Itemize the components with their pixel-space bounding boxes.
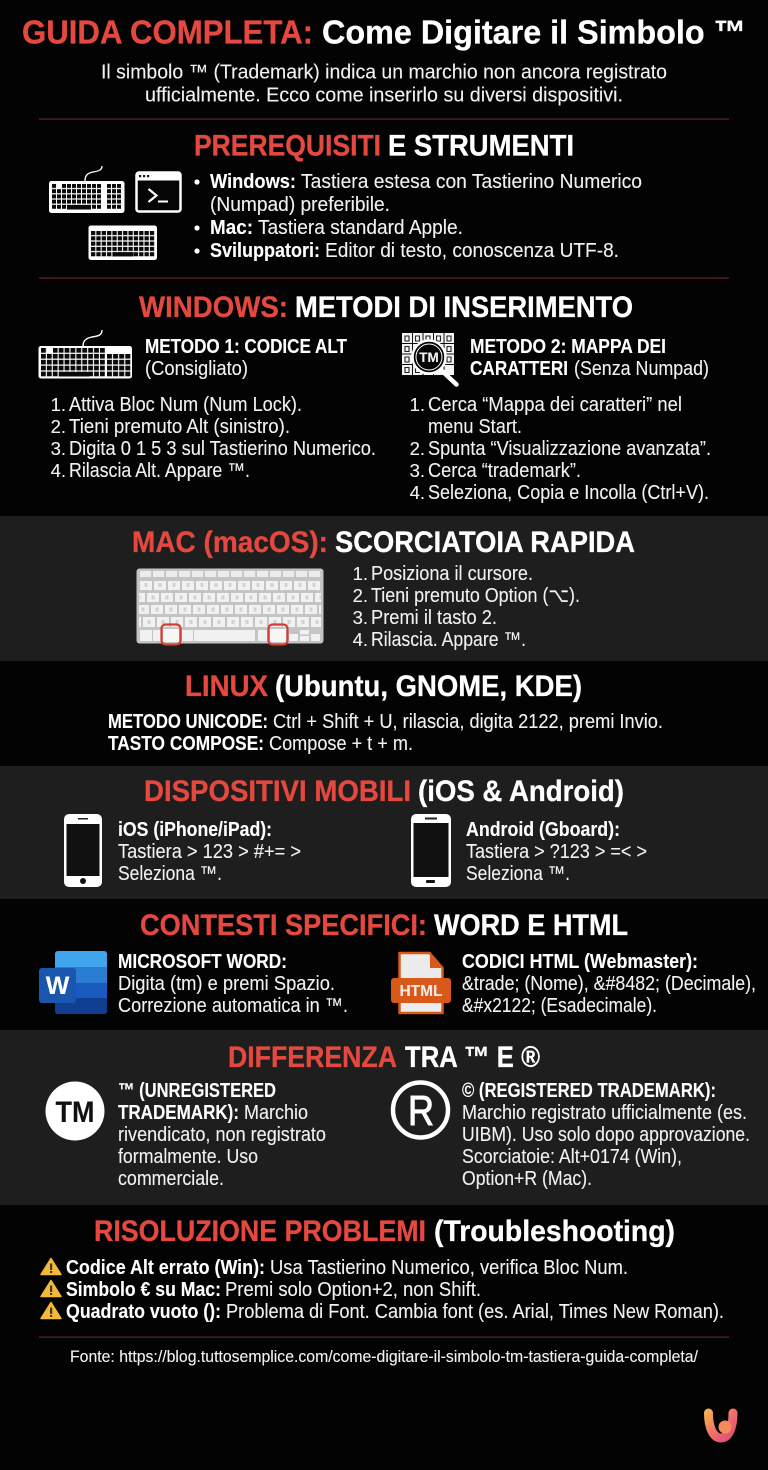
title: [22, 14, 746, 50]
issue: empty square: Problema di Font. Cambia font (es. Arial, Times New Roman).: [226, 1301, 724, 1323]
bullet list: prerequisites: [194, 171, 642, 262]
method 2 steps: 1.: [410, 394, 425, 415]
title: GUIDA COMPLETA:: [22, 14, 313, 50]
heading: contesti: CONTESTI SPECIFICI:: [140, 909, 427, 942]
mac steps: Posiziona il cursore.: [371, 563, 533, 585]
android instructions: Android (Gboard):: [466, 819, 620, 841]
bullet list: prerequisites: Tastiera estesa con Tastierino Numerico: [301, 171, 642, 193]
method 1 steps: 2.: [51, 416, 66, 437]
icon: registered circle: [393, 1082, 448, 1138]
issue: empty square: [41, 1301, 724, 1323]
tm description: rivendicato, non registrato: [118, 1124, 326, 1146]
tm description: commerciale.: [118, 1168, 224, 1190]
heading: windows: [139, 291, 633, 324]
registered description: Scorciatoie: Alt+0174 (Win),: [462, 1146, 682, 1168]
method 2 title: [470, 336, 709, 380]
tm description: Marchio: [244, 1102, 308, 1124]
heading: differenza: [228, 1041, 540, 1074]
intro text: [101, 62, 667, 106]
mac steps: 4.: [353, 629, 368, 650]
panel: mobile: [0, 766, 768, 899]
issue: alt code: Codice Alt errato (Win):: [66, 1257, 265, 1279]
heading: contesti: [140, 909, 628, 942]
method 1 title: (Consigliato): [145, 358, 248, 380]
bullet list: prerequisites: (Numpad) preferibile.: [210, 194, 390, 216]
icon: html file: HTML: [400, 983, 442, 1000]
method 1 steps: 4.: [51, 460, 66, 481]
icon: html file: [391, 953, 451, 1013]
registered description: [462, 1080, 750, 1190]
method 2 steps: 3.: [410, 460, 425, 481]
html codes: CODICI HTML (Webmaster):: [462, 951, 698, 973]
icon: iphone: [64, 814, 102, 887]
method 2 steps: Spunta “Visualizzazione avanzata”.: [428, 438, 711, 460]
bullet list: prerequisites: Mac:: [210, 217, 253, 239]
panel: windows: [38, 291, 711, 504]
heading: troubleshooting: RISOLUZIONE PROBLEMI: [94, 1215, 426, 1248]
ios instructions: Seleziona ™.: [118, 863, 222, 885]
heading: prerequisiti: PREREQUISITI: [194, 130, 381, 162]
html codes: &#x2122; (Esadecimale).: [462, 995, 657, 1017]
method 2 title: METODO 2: MAPPA DEI: [470, 336, 666, 358]
tm description: [118, 1080, 326, 1190]
heading: windows: WINDOWS:: [139, 291, 288, 324]
panel: intro: [22, 14, 746, 106]
panel: linux: [0, 661, 768, 766]
tm description: ™ (UNREGISTERED: [118, 1080, 276, 1102]
panel: contesti specifici: [0, 899, 768, 1030]
ios instructions: Tastiera > 123 > #+= >: [118, 841, 301, 863]
word instructions: [118, 951, 348, 1017]
word instructions: MICROSOFT WORD:: [118, 951, 287, 973]
heading: mobile: (iOS & Android): [418, 775, 624, 808]
heading: prerequisiti: [194, 130, 574, 162]
word instructions: Digita (tm) e premi Spazio.: [118, 973, 335, 995]
linux methods: METODO UNICODE:: [108, 711, 268, 733]
heading: differenza: DIFFERENZA: [228, 1041, 397, 1074]
issue: empty square: Quadrato vuoto ():: [66, 1301, 221, 1323]
mac steps: 3.: [353, 607, 368, 628]
tm description: formalmente. Uso: [118, 1146, 258, 1168]
android instructions: Tastiera > ?123 > =< >: [466, 841, 647, 863]
icon: microsoft word: W: [46, 972, 70, 1000]
heading: linux: (Ubuntu, GNOME, KDE): [275, 670, 582, 703]
mac steps: 2.: [353, 585, 368, 606]
icon: extended keyboard: [49, 166, 124, 213]
bullet list: prerequisites: Tastiera standard Apple.: [258, 217, 463, 239]
icon: registered circle: R: [408, 1087, 434, 1134]
linux methods: TASTO COMPOSE:: [108, 733, 264, 755]
issue: alt code: Usa Tastierino Numerico, verifica Bloc Num.: [270, 1257, 628, 1279]
method 2 title: CARATTERI: [470, 358, 568, 380]
method 1 steps: Rilascia Alt. Appare ™.: [69, 460, 250, 482]
html codes: [462, 951, 756, 1017]
method 1 title: METODO 1: CODICE ALT: [145, 336, 347, 358]
ios instructions: iOS (iPhone/iPad):: [118, 819, 272, 841]
linux methods: Ctrl + Shift + U, rilascia, digita 2122, premi Invio.: [273, 711, 663, 733]
icon: microsoft word: [39, 951, 107, 1014]
heading: troubleshooting: (Troubleshooting): [434, 1215, 675, 1248]
icon: terminal window: [136, 172, 180, 212]
bullet list: prerequisites: Windows:: [210, 171, 296, 193]
method 2 steps: Cerca “Mappa dei caratteri” nel: [428, 394, 682, 416]
method 1 steps: [51, 394, 376, 482]
method 2 title: (Senza Numpad): [574, 358, 709, 380]
method 1 steps: Digita 0 1 5 3 sul Tastierino Numerico.: [69, 438, 376, 460]
title: Come Digitare il Simbolo ™: [322, 14, 746, 50]
heading: contesti: WORD E HTML: [434, 909, 628, 942]
issue: alt code: [41, 1257, 628, 1279]
intro text: ufficialmente. Ecco come inserirlo su diversi dispositivi.: [145, 84, 623, 106]
icon: logo: [708, 1413, 733, 1438]
method 2 steps: Seleziona, Copia e Incolla (Ctrl+V).: [428, 482, 709, 504]
mac steps: 1.: [353, 563, 368, 584]
panel: troubleshooting: [41, 1215, 724, 1323]
icon: full keyboard: [38, 330, 132, 378]
heading: mobile: [144, 775, 624, 808]
icon: android phone: [411, 814, 451, 887]
panel: mac: [0, 516, 768, 661]
method 2 steps: Cerca “trademark”.: [428, 460, 581, 482]
android instructions: [466, 819, 647, 885]
intro text: Il simbolo ™ (Trademark) indica un marchio non ancora registrato: [101, 62, 667, 84]
issue: euro on mac: Simbolo € su Mac:: [66, 1279, 221, 1301]
method 2 steps: [410, 394, 711, 504]
ios instructions: [118, 819, 301, 885]
icon: mac keyboard with highlighted option keys: [136, 568, 324, 644]
mac steps: [353, 563, 580, 651]
method 2 steps: menu Start.: [428, 416, 522, 438]
bullet list: prerequisites: Editor di testo, conoscenza UTF-8.: [325, 240, 619, 262]
method 2 steps: 4.: [410, 482, 425, 503]
method 1 steps: 3.: [51, 438, 66, 459]
android instructions: Seleziona ™.: [466, 863, 570, 885]
issue: euro on mac: Premi solo Option+2, non Shift.: [225, 1279, 481, 1301]
method 1 steps: Attiva Bloc Num (Num Lock).: [69, 394, 302, 416]
heading: mac: MAC (macOS):: [132, 526, 328, 559]
registered description: © (REGISTERED TRADEMARK):: [462, 1080, 716, 1102]
method 1 steps: Tieni premuto Alt (sinistro).: [69, 416, 290, 438]
icon: character map with magnifier: TM: [419, 350, 439, 365]
word instructions: Correzione automatica in ™.: [118, 995, 348, 1017]
icon: apple keyboard: [88, 226, 157, 260]
heading: linux: LINUX: [185, 670, 268, 703]
heading: mac: [132, 526, 635, 559]
icon: character map with magnifier: [402, 333, 456, 384]
tm description: TRADEMARK):: [118, 1102, 239, 1124]
heading: prerequisiti: E STRUMENTI: [388, 130, 574, 162]
issue: euro on mac: [41, 1279, 481, 1301]
heading: troubleshooting: [94, 1215, 675, 1248]
mac steps: Premi il tasto 2.: [371, 607, 497, 629]
method 1 steps: 1.: [51, 394, 66, 415]
linux methods: Compose + t + m.: [269, 733, 413, 755]
mac steps: Tieni premuto Option (⌥).: [371, 585, 580, 607]
linux methods: [108, 711, 663, 755]
method 2 steps: 2.: [410, 438, 425, 459]
panel: prerequisiti: [49, 130, 642, 262]
bullet list: prerequisites: Sviluppatori:: [210, 240, 320, 262]
heading: windows: METODI DI INSERIMENTO: [295, 291, 633, 324]
method 1 title: [145, 336, 347, 380]
icon: tm circle: TM: [56, 1096, 94, 1129]
panel: differenza: [0, 1030, 768, 1205]
heading: mobile: DISPOSITIVI MOBILI: [144, 775, 411, 808]
mac steps: Rilascia. Appare ™.: [371, 629, 526, 651]
icon: tm circle: [46, 1082, 104, 1140]
source line: Fonte: https://blog.tuttosemplice.com/come-digitare-il-simbolo-tm-tastiera-guida-completa/: [70, 1348, 698, 1366]
heading: mac: SCORCIATOIA RAPIDA: [335, 526, 635, 559]
heading: differenza: TRA ™ E ®: [405, 1041, 540, 1074]
registered description: Option+R (Mac).: [462, 1168, 592, 1190]
